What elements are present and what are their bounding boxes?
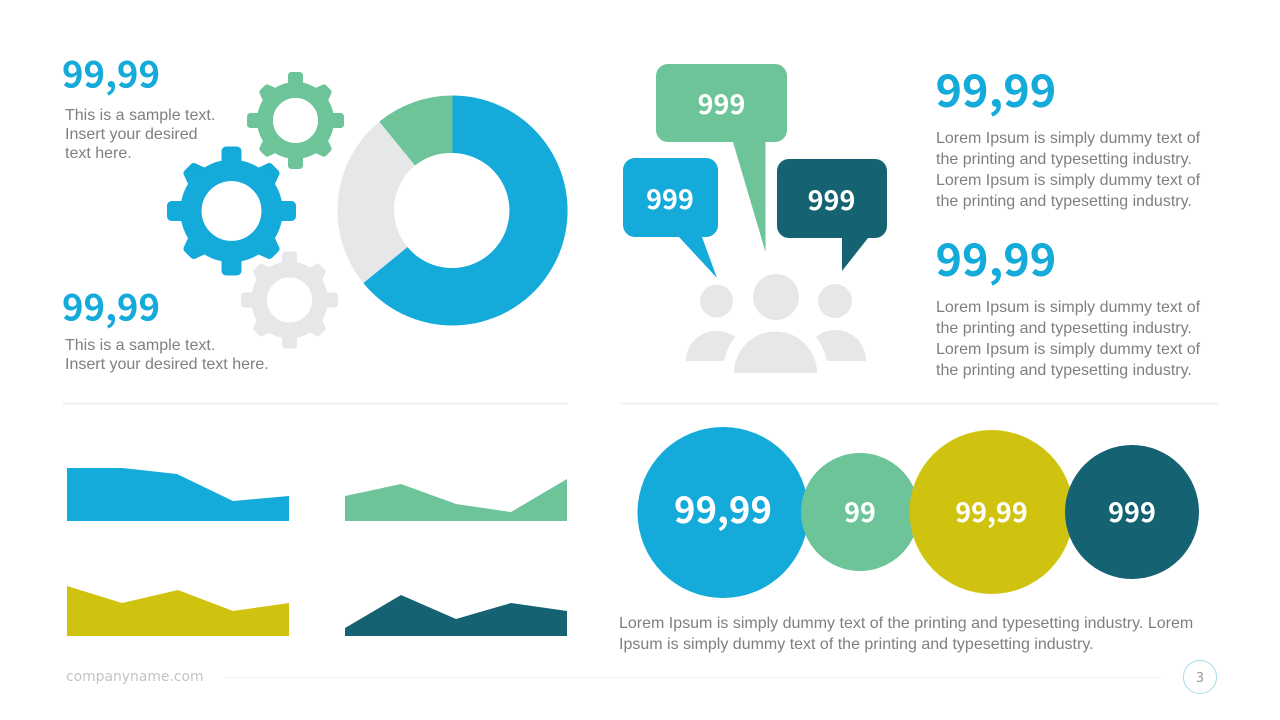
circle: yellow value <box>910 430 1074 594</box>
text: top-left sample text: Insert your desired <box>65 126 198 143</box>
footer: page number <box>1184 660 1216 694</box>
circle: dark teal value <box>1065 445 1199 579</box>
text: lorem paragraph 1: the printing and typesetting industry. <box>936 193 1192 210</box>
text: top-left sample text: This is a sample text. <box>65 107 215 124</box>
speech bubble: blue <box>623 158 718 278</box>
text: lorem paragraph 2: Lorem Ipsum is simply dummy text of <box>936 341 1201 358</box>
stat: right value 1: 99,99 <box>936 55 1056 120</box>
donut chart <box>337 95 568 325</box>
area chart: blue <box>67 468 289 521</box>
icon: green gear <box>247 72 344 169</box>
text: top-left sample text: text here. <box>65 145 132 162</box>
stat: right value 2 <box>936 224 1201 379</box>
area chart: green <box>345 479 567 521</box>
circle: green value: 99 <box>844 491 876 530</box>
stat: right value 2: 99,99 <box>936 224 1056 289</box>
icon: gray gear <box>241 252 338 348</box>
footer: page number: 3 <box>1196 671 1204 686</box>
speech bubble: blue: 999 <box>646 178 694 217</box>
speech bubble: dark teal <box>777 159 887 271</box>
text: bottom paragraph: Lorem Ipsum is simply dummy text of the printing and typesetting industry. Lorem <box>619 615 1193 632</box>
text: lorem paragraph 2: Lorem Ipsum is simply dummy text of <box>936 299 1201 316</box>
footer: company name: companyname.com <box>66 669 204 685</box>
icon: group of people <box>686 274 866 373</box>
speech bubble: dark teal: 999 <box>808 179 855 218</box>
stat: top-left value <box>62 46 215 162</box>
stat: lower-left value: 99,99 <box>62 278 160 332</box>
text: bottom paragraph: Ipsum is simply dummy text of the printing and typesetting industry. <box>619 636 1094 653</box>
text: lower-left sample text: Insert your desired text here. <box>65 356 269 373</box>
text: lorem paragraph 1: the printing and typesetting industry. <box>936 151 1192 168</box>
circle: blue value <box>638 427 808 598</box>
icon: blue gear <box>167 146 296 276</box>
circle: blue value: 99,99 <box>674 481 772 534</box>
circle: green value <box>801 453 919 571</box>
speech bubble: green: 999 <box>698 83 745 122</box>
stat: right value 1 <box>936 55 1201 210</box>
speech bubble: green <box>656 64 787 252</box>
stat: lower-left value <box>62 278 269 373</box>
text: lorem paragraph 2: the printing and typesetting industry. <box>936 362 1192 379</box>
circle: dark teal value: 999 <box>1108 491 1156 530</box>
text: lorem paragraph 1: Lorem Ipsum is simply dummy text of <box>936 172 1201 189</box>
stat: top-left value: 99,99 <box>62 46 160 98</box>
area chart: dark teal <box>345 595 567 636</box>
circle: yellow value: 99,99 <box>955 491 1028 530</box>
text: lorem paragraph 1: Lorem Ipsum is simply dummy text of <box>936 130 1201 147</box>
text: lorem paragraph 2: the printing and typesetting industry. <box>936 320 1192 337</box>
area chart: yellow <box>67 586 289 636</box>
text: lower-left sample text: This is a sample text. <box>65 337 215 354</box>
